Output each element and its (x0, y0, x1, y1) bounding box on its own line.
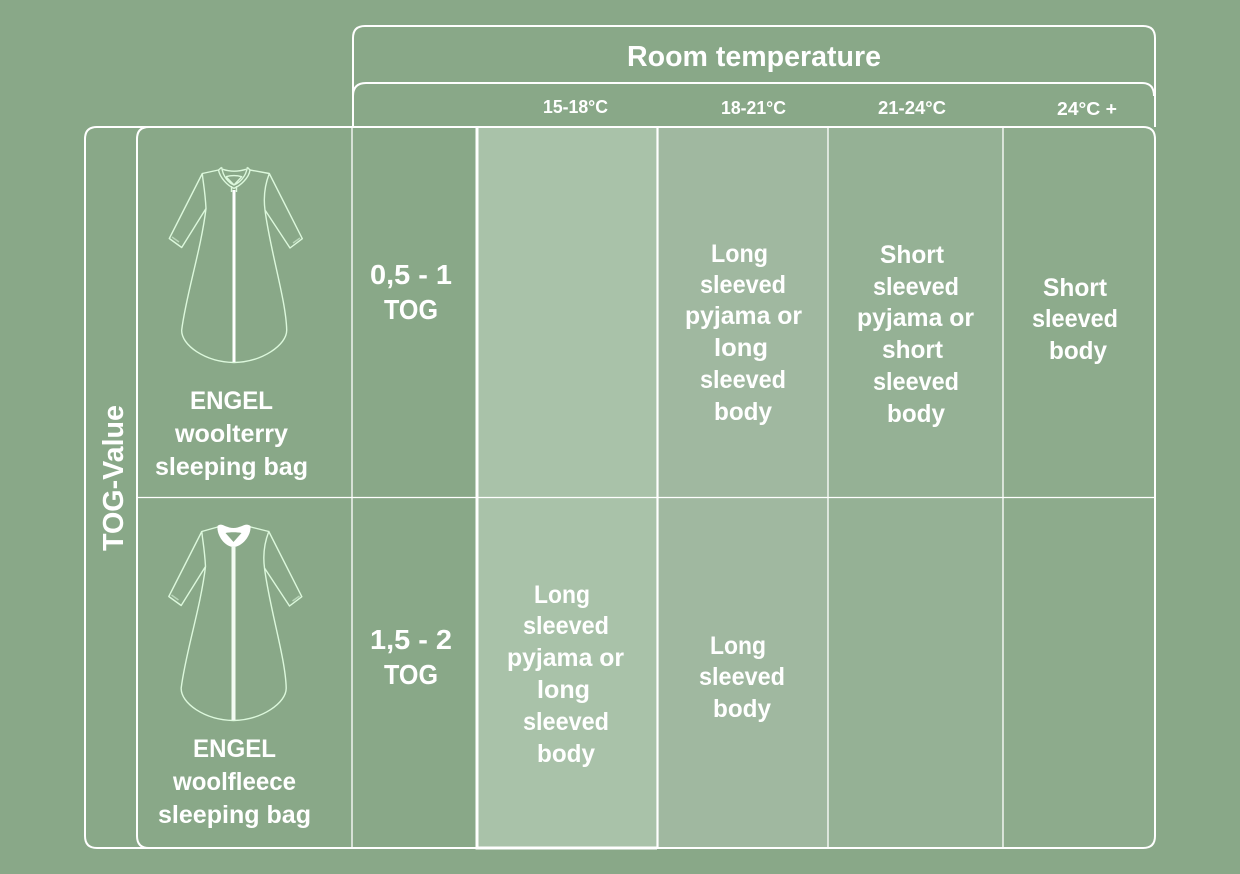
cell: 0,5-1 TOG at 24°C +: sleeved (1032, 305, 1118, 333)
text: ENGEL woolterry sleeping bag (155, 387, 308, 481)
text: ENGEL woolfleece sleeping bag (158, 735, 311, 829)
cell: 0,5-1 TOG at 18-21°C: body (714, 398, 772, 426)
cell: 0,5-1 TOG at 18-21°C: sleeved (700, 366, 786, 394)
label: 0,5 - 1 TOG: 0,5 - 1 (370, 259, 452, 290)
label: 0,5 - 1 TOG: TOG (384, 294, 438, 325)
label: 1,5 - 2 TOG: TOG (384, 659, 438, 690)
cell: 0,5-1 TOG at 21-24°C: short (882, 336, 944, 364)
cell: 0,5-1 TOG at 21-24°C: Short (880, 241, 945, 269)
text: ENGEL woolfleece sleeping bag: ENGEL (193, 735, 276, 763)
cell: 0,5-1 TOG at 24°C +: body (1049, 337, 1107, 365)
heading: TOG-Value: TOG-Value (98, 405, 130, 551)
column shading: 21-24°C (828, 127, 1003, 848)
panel: table frame (85, 127, 1155, 848)
cell: 0,5-1 TOG at 18-21°C: Long (711, 240, 768, 268)
text: ENGEL woolfleece sleeping bag: sleeping bag (158, 801, 311, 829)
label: 1,5 - 2 TOG: 1,5 - 2 (370, 624, 452, 655)
cell: 1,5-2 TOG at 18-21°C (699, 632, 785, 723)
label: 15-18°C: 15-18°C (543, 97, 608, 117)
temperature labels (543, 97, 1117, 119)
cell: 1,5-2 TOG at 15-18°C: long (537, 676, 590, 704)
cell: 0,5-1 TOG at 21-24°C: body (887, 400, 945, 428)
cell: 0,5-1 TOG at 18-21°C (685, 240, 802, 426)
cell: 0,5-1 TOG at 21-24°C: sleeved (873, 273, 959, 301)
cell: 0,5-1 TOG at 21-24°C (857, 241, 974, 428)
cell: 1,5-2 TOG at 18-21°C: Long (710, 632, 766, 660)
cell: 1,5-2 TOG at 15-18°C: sleeved (523, 612, 609, 640)
cell: 0,5-1 TOG at 21-24°C: sleeved (873, 368, 959, 396)
text: ENGEL woolterry sleeping bag: ENGEL (190, 387, 273, 415)
column shading: 18-21°C (657, 127, 828, 848)
cell: 0,5-1 TOG at 18-21°C: sleeved (700, 271, 786, 299)
cell: 1,5-2 TOG at 15-18°C: sleeved (523, 708, 609, 736)
cell: 0,5-1 TOG at 24°C +: Short (1043, 274, 1108, 302)
cell: 1,5-2 TOG at 18-21°C: sleeved (699, 663, 785, 691)
column shading: 15-18°C (477, 127, 657, 848)
column shading: 24°C + (1003, 127, 1155, 848)
icon: woolfleece sleeping bag (169, 525, 302, 720)
cell: 1,5-2 TOG at 15-18°C: body (537, 740, 595, 768)
cell: 1,5-2 TOG at 15-18°C: Long (534, 581, 590, 609)
cell: 0,5-1 TOG at 21-24°C: pyjama or (857, 304, 974, 332)
panel: room temperature frame (353, 26, 1155, 127)
label: 21-24°C: 21-24°C (878, 98, 946, 118)
cell: 0,5-1 TOG at 18-21°C: pyjama or (685, 302, 802, 330)
text: ENGEL woolfleece sleeping bag: woolfleece (172, 768, 296, 796)
cell: 0,5-1 TOG at 24°C + (1032, 274, 1118, 365)
label: 0,5 - 1 TOG (370, 259, 452, 325)
heading: Room temperature: Room temperature (627, 41, 881, 73)
cell: 0,5-1 TOG at 18-21°C: long (714, 334, 768, 362)
label: 18-21°C: 18-21°C (721, 98, 786, 118)
cell: 1,5-2 TOG at 18-21°C: body (713, 695, 771, 723)
icon: woolterry sleeping bag (169, 167, 302, 362)
text: ENGEL woolterry sleeping bag: woolterry (174, 420, 288, 448)
cell: 1,5-2 TOG at 15-18°C (507, 581, 624, 768)
cell: 1,5-2 TOG at 15-18°C: pyjama or (507, 644, 624, 672)
label: 1,5 - 2 TOG (370, 624, 452, 690)
label: 24°C +: 24°C + (1057, 99, 1117, 119)
text: ENGEL woolterry sleeping bag: sleeping bag (155, 453, 308, 481)
